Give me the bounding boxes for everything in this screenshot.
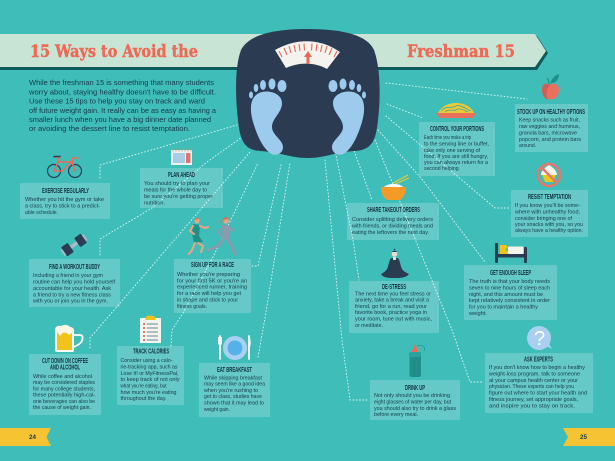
panel: resist temptation: RESIST TEMPTATION [528,192,571,201]
title banner [0,34,548,70]
panel: ask experts: and inspire you to stay on track. [489,404,575,410]
panel: de-stress: The next time you feel stress or [355,292,431,298]
icon: apple [542,74,559,100]
panel: control your portions [419,122,495,176]
panel: de-stress: favorite book, practice yoga in [355,310,427,316]
icon: rice bowl [381,175,409,200]
panel: sign up for a race [174,259,251,313]
panel: drink up: Not only should you be drinking [374,393,450,399]
icon: no cupcake [538,164,560,186]
page tab 25: 25 [580,434,587,441]
panel: track calories [117,346,184,405]
panel: get enough sleep: for you to maintain a healthy [469,304,538,310]
bathroom scale [236,29,380,158]
panel: share takeout orders: with friends, or dividing meals and [351,224,433,230]
panel: get enough sleep: night, and this amount must be [469,292,544,298]
panel: ask experts [485,353,593,413]
panel: sign up for a race: fitness goals. [177,304,207,310]
intro paragraph [28,78,217,133]
panel: control your portions: Each time you make a trip [424,135,471,141]
panel: sign up for a race: for your first 5K or you're an [177,278,247,284]
panel: share takeout orders: Consider splitting delivery orders [352,217,433,223]
scale display [275,41,340,69]
panel: plan ahead [140,168,223,208]
panel: exercise regularly: EXERCISE REGULARLY [42,186,89,195]
panel: cut down on coffee and alcohol: for many college students, [33,386,95,392]
panel: cut down on coffee and alcohol [29,354,101,415]
icon: question bubble [527,326,552,350]
panel: sign up for a race: for a race will help you get [177,291,241,297]
panel: find a workout buddy: routine can help you hold yourself [33,280,115,286]
left foot [249,78,286,155]
panel: drink up [370,380,460,420]
panel: eat breakfast: when you're rushing to [203,388,259,394]
panel: de-stress: anxiety, take a break and visit a [355,298,430,304]
panel: ask experts: fitness journey, set appropriate goals, [489,397,578,403]
panel: eat breakfast [199,363,270,417]
intro paragraph: worry about, staying healthy doesn't have to be difficult. [28,88,216,96]
panel: cut down on coffee and alcohol: these potentially high-cal- [33,392,95,398]
panel: get enough sleep: GET ENOUGH SLEEP [490,268,531,277]
panel: control your portions: food. If you are still hungry, [424,154,488,160]
panel: resist temptation [511,190,588,237]
panel: de-stress [349,281,439,333]
icon: calendar [171,148,192,165]
panel: plan ahead: be sure you're getting proper [144,194,213,200]
icon: beer mug [55,325,83,352]
panel: get enough sleep [464,265,557,320]
icon: pasta [436,103,476,118]
panel: control your portions: to the serving line or buffet, [424,142,489,148]
panel: control your portions: take only one serving of [424,148,480,154]
panel: drink up: before every meal. [374,412,418,418]
panel: resist temptation: your snacks with you, so you [515,222,583,228]
intro paragraph: or avoiding the dessert line to resist temptation. [29,124,190,133]
icon: plate with cutlery [218,336,251,360]
icon: bed [495,243,527,263]
panel: find a workout buddy [29,259,120,307]
panel: stock up on healthy options: around. [519,143,536,149]
panel: track calories: to keep track of not only [120,377,180,383]
panel: eat breakfast: shown that it may lead to [204,400,265,406]
panel: eat breakfast: get to class, studies have [204,394,263,400]
icon: question bubble: ? [534,328,545,350]
panel: get enough sleep: seven to nine hours of sleep each [469,286,550,292]
panel: track calories: rie-tracking app, such as [120,364,178,370]
intro paragraph: While the freshman 15 is something that many students [29,78,214,87]
panel: ask experts: weight-loss program, talk to someone [488,372,581,378]
panel: plan ahead: meals for the whole day to [144,188,208,194]
panel: eat breakfast: may seem like a good idea [204,382,266,388]
title left: 15 Ways to Avoid the [30,42,198,62]
icon: clipboard [140,316,161,343]
icon: runners [189,217,235,254]
panel: sign up for a race: in shape and stick to your [177,298,238,304]
title right: Freshman 15 [407,42,515,62]
panel: resist temptation: always have a healthy option. [515,228,583,234]
panel: sign up for a race: SIGN UP FOR A RACE [191,260,234,269]
panel: sign up for a race: Whether you're preparing [177,272,240,278]
panel: control your portions: you can always return for a [424,160,489,166]
panel: find a workout buddy: accountable for your health. Ask [33,286,111,292]
page tab 24 [0,428,51,446]
panel: stock up on healthy options: raw veggies and hummus, [519,124,580,130]
panel: track calories: throughout the day. [120,396,167,402]
panel: resist temptation: consider bringing one of [515,216,572,222]
intro paragraph: Use these 15 tips to help you stay on track and ward [29,96,205,106]
panel: de-stress: friend, go for a run, read your [355,304,427,310]
panel: de-stress: your room, tune out with music, [355,316,432,322]
panel: stock up on healthy options: Keep snacks such as fruit, [519,118,580,124]
page tab 24: 24 [29,434,36,441]
panel: plan ahead: nutrition. [144,200,165,206]
panel: stock up on healthy options: granola bars, microwave [519,130,578,136]
right foot [328,78,366,155]
panel: control your portions: CONTROL YOUR PORTIONS [430,124,484,133]
panel: control your portions: second helping. [424,166,460,172]
panel: cut down on coffee and alcohol: the cause of weight gain. [33,405,91,411]
panel: drink up: eight glasses of water per day, but [374,400,451,406]
panel: plan ahead: PLAN AHEAD [168,170,195,179]
page tab 25 [563,428,615,446]
panel: share takeout orders [347,203,439,240]
panel: track calories: what you're eating, but [120,384,167,390]
panel: find a workout buddy: FIND A WORKOUT BUDDY [49,262,100,271]
panel: plan ahead: You should try to plan your [144,181,210,187]
panel: get enough sleep: kept relatively consistent in order [469,298,550,304]
panel: ask experts: If you don't know how to begin a healthy [489,365,585,371]
panel: eat breakfast: While skipping breakfast [204,376,262,382]
panel: de-stress: or meditate. [355,323,383,329]
panel: get enough sleep: weight. [468,311,487,317]
panel: track calories: TRACK CALORIES [133,346,169,356]
panel: de-stress: DE-STRESS [382,282,406,291]
panel: eat breakfast: weight gain. [203,407,230,413]
panel: ask experts: figure out where to start your health and [489,390,587,396]
panel: ask experts: physician. These experts can help you [489,384,574,390]
panel: ask experts: at your campus health center or your [489,378,578,384]
panel: exercise regularly: Whether you hit the gym or take [25,197,105,203]
man [189,218,208,254]
panel: sign up for a race: experienced runner, training [177,284,247,290]
panel: track calories: Lose It! or MyFitnessPal, [120,371,179,377]
panel: exercise regularly: a class, try to stick to a predict- [25,204,100,210]
woman [209,217,235,254]
panel: cut down on coffee and alcohol: may be considered staples [33,380,95,386]
panel: find a workout buddy: with you or join you in the gym. [32,298,108,304]
panel: cut down on coffee and alcohol: orie beverages can also be [33,399,96,405]
panel: eat breakfast: EAT BREAKFAST [217,365,252,374]
panel: share takeout orders: eating the leftovers the next day. [352,230,429,236]
panel: ask experts: ASK EXPERTS [524,354,553,364]
panel: find a workout buddy: a friend to try a new fitness class [33,292,111,298]
panel: resist temptation: If you know you'll be some- [515,203,580,209]
panel: find a workout buddy: Including a friend in your gym [33,273,103,279]
panel: share takeout orders: SHARE TAKEOUT ORDERS [367,205,420,214]
panel: resist temptation: where with unhealthy food, [514,210,580,216]
panel: track calories: how much you're eating [120,390,176,396]
icon: bicycle [48,156,82,178]
panel: drink up: you should also try to drink a glass [374,406,456,412]
icon: meditating figure [381,248,409,278]
icon: dumbbell [59,232,89,258]
panel: stock up on healthy options: popcorn, and protein bars [519,137,581,143]
panel: exercise regularly [20,183,110,219]
panel: track calories: Consider using a calo- [120,358,173,364]
panel: stock up on healthy options [515,104,588,152]
panel: get enough sleep: The truth is that your body needs [469,279,550,285]
panel: cut down on coffee and alcohol: While coffee and alcohol [33,374,92,380]
panel: cut down on coffee and alcohol: CUT DOWN ON COFFEE [42,356,88,365]
icon: water bottle [409,344,425,377]
intro paragraph: smaller lunch when you have a big dinner date planned [29,115,211,124]
intro paragraph: off future weight gain. It really can be as easy as having a [29,106,217,115]
panel: drink up: DRINK UP [405,383,425,392]
panel: cut down on coffee and alcohol: AND ALCOHOL [50,362,80,372]
panel: exercise regularly: able schedule. [25,210,58,216]
